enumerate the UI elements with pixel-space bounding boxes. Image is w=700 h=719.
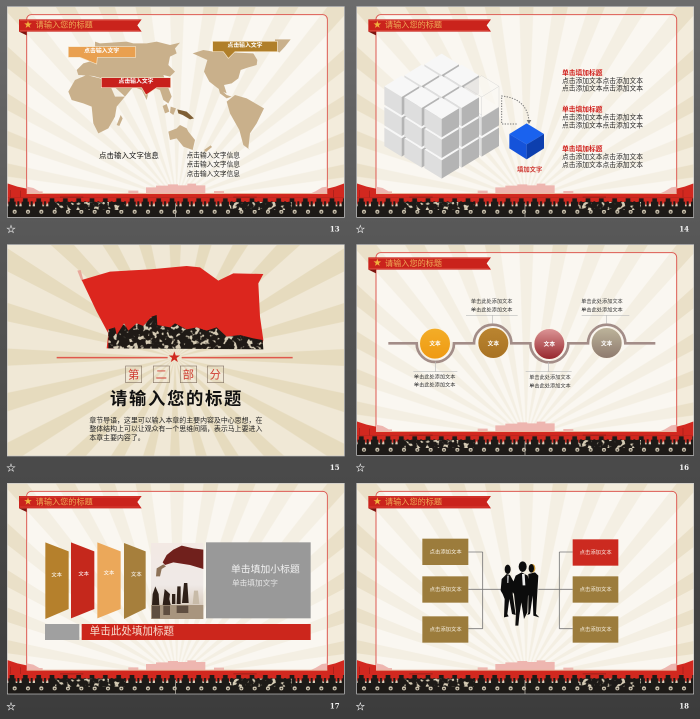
grey text box [206, 542, 311, 618]
world map [68, 39, 291, 152]
left box 1: 点击添加文本 [430, 547, 462, 555]
text group 2: 点击添加文本点击添加文本 [562, 121, 643, 130]
panel 1: 文本 [51, 571, 63, 579]
text group 3 [562, 144, 643, 169]
footer icon [357, 703, 364, 710]
left box 3: 点击添加文本 [430, 625, 462, 633]
slide number: 18 [679, 702, 689, 711]
slide number: 14 [679, 224, 689, 233]
node 1 [420, 328, 450, 359]
slide 17 background [7, 483, 344, 694]
label 1 [413, 362, 457, 389]
slide number: 16 [679, 463, 689, 472]
footer icon [7, 703, 15, 710]
connector lines [468, 552, 573, 629]
slide 17 title: 请输入您的标题 [36, 497, 93, 507]
slide 18: team diagram [357, 483, 694, 711]
slide 16 background [357, 245, 694, 455]
section paragraph: 整体结构上可以让观众有一个思维间隔，表示马上要进入 [89, 424, 262, 433]
panel 4 [124, 543, 146, 619]
slide 17: chess layout [7, 483, 344, 711]
panel 3 [97, 542, 121, 618]
footer icon [357, 464, 364, 471]
callout: orange: 点击输入文字 [84, 47, 119, 55]
red title bar: 单击此处填加标题 [90, 625, 174, 638]
node 1: 文本 [429, 340, 441, 348]
divider line with star [57, 351, 293, 362]
slide 18 background [357, 483, 694, 694]
caption right [187, 150, 240, 178]
node 4 [591, 328, 622, 358]
label 4: 单击此处添加文本 [581, 297, 623, 305]
white cube stack [384, 54, 499, 179]
footer icon [357, 225, 364, 233]
cube label: 填加文字 [517, 164, 542, 173]
right box 2: 点击添加文本 [580, 585, 612, 593]
label 1: 单击此处添加文本 [414, 381, 455, 389]
right box 1 [573, 539, 618, 566]
text group 2: 单击填加标题 [562, 105, 603, 114]
slide 14 background [357, 7, 694, 217]
slide 18 title: 请输入您的标题 [385, 497, 442, 507]
flag crowd [108, 315, 263, 349]
left box 1 [422, 539, 468, 565]
text group 3: 点击添加文本点击添加文本 [562, 152, 643, 161]
slide 13 title: 请输入您的标题 [36, 20, 93, 30]
red flag [77, 266, 263, 348]
right box 1: 点击添加文本 [580, 548, 612, 556]
node 2 [478, 328, 509, 358]
node 4: 文本 [601, 340, 613, 348]
callout: red [101, 77, 171, 95]
left box 2 [422, 576, 468, 603]
caption right: 点击输入文字信息 [187, 159, 240, 168]
label 3: 单击此处添加文本 [529, 381, 571, 389]
left box 3 [422, 616, 468, 643]
right box 3 [573, 616, 618, 643]
panel 1 [45, 542, 69, 619]
label 2 [466, 297, 518, 323]
section label text: 部 [183, 367, 194, 381]
slide 15 background [7, 245, 344, 456]
section title: 请输入您的标题 [110, 388, 243, 408]
footer icon [7, 464, 15, 471]
callout: brown [213, 41, 277, 58]
node 2: 文本 [488, 340, 499, 348]
text group 1 [562, 68, 643, 93]
section paragraph: 章节导语，这里可以输入本章的主要内容及中心思想，在 [89, 416, 262, 425]
caption right: 点击输入文字信息 [187, 150, 240, 159]
callout: orange [68, 47, 136, 64]
slide 16 title: 请输入您的标题 [385, 258, 442, 268]
chess photo [151, 543, 203, 619]
label 2: 单击此处添加文本 [471, 305, 512, 313]
slide 14 title: 请输入您的标题 [385, 20, 442, 30]
section label text [128, 367, 221, 381]
slide 14: cube [357, 7, 694, 233]
grey text box: 单击填加文字 [232, 578, 278, 588]
label 1: 单击此处添加文本 [414, 372, 455, 380]
text group 1: 点击添加文本点击添加文本 [562, 84, 643, 93]
slide number: 17 [330, 702, 340, 711]
slide number: 15 [330, 463, 340, 472]
panel 3: 文本 [104, 569, 115, 577]
grey text box: 单击填加小标题 [231, 562, 300, 575]
label 3 [526, 362, 572, 389]
panel 2: 文本 [78, 569, 90, 577]
text group 1: 单击填加标题 [562, 68, 603, 77]
callout: brown: 点击输入文字 [228, 41, 263, 49]
label 3: 单击此处添加文本 [529, 373, 571, 381]
label 4: 单击此处添加文本 [581, 305, 623, 313]
callout: red: 点击输入文字 [119, 77, 154, 85]
left box 2: 点击添加文本 [430, 585, 462, 593]
section paragraph: 本章主要内容了。 [89, 433, 145, 442]
panel 4: 文本 [131, 570, 142, 578]
section label text: 第 [128, 367, 139, 381]
section label text: 分 [210, 368, 221, 381]
section paragraph [89, 416, 262, 442]
slide number: 13 [330, 224, 340, 233]
caption right: 点击输入文字信息 [187, 169, 240, 178]
right box 3: 点击添加文本 [580, 625, 612, 633]
slide 13 background [7, 7, 344, 217]
text group 2: 点击添加文本点击添加文本 [562, 113, 643, 122]
timeline line and arcs [388, 325, 655, 362]
business people silhouette [501, 561, 539, 626]
section label boxes [126, 366, 224, 383]
caption left: 点击输入文字信息 [99, 150, 159, 160]
slide 15: section divider [7, 245, 344, 472]
blue cube [509, 123, 544, 159]
section label text: 二 [156, 369, 167, 381]
text group 3: 点击添加文本点击添加文本 [562, 160, 643, 169]
label 4 [581, 297, 629, 323]
slide 13: world map [7, 7, 344, 233]
node 3 [534, 329, 565, 359]
text group 2 [562, 105, 643, 130]
node 3: 文本 [544, 340, 555, 348]
panel 2 [71, 542, 94, 618]
dotted arrow [502, 96, 531, 124]
footer icon [7, 225, 15, 233]
grey block [45, 624, 79, 640]
red title bar [82, 624, 311, 640]
label 2: 单击此处添加文本 [471, 297, 512, 305]
right box 2 [573, 576, 618, 603]
slide 16: timeline [357, 245, 694, 472]
text group 3: 单击填加标题 [562, 144, 603, 153]
text group 1: 点击添加文本点击添加文本 [562, 76, 643, 85]
